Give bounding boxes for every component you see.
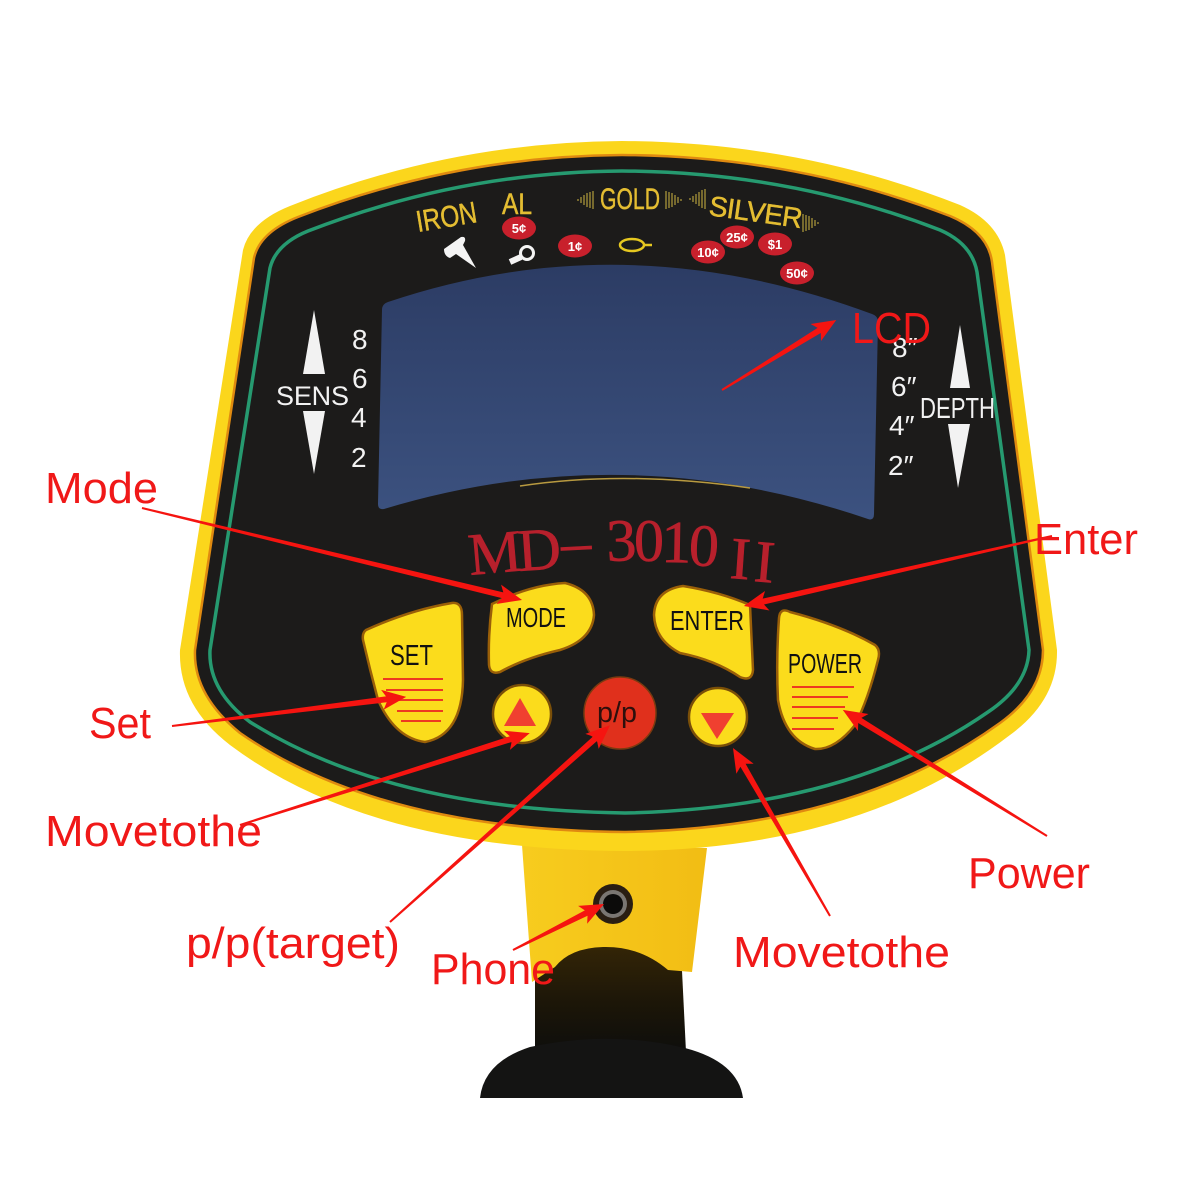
coin markers bbox=[502, 216, 814, 284]
annotation arrows bbox=[140, 311, 1054, 959]
sens scale: 8 bbox=[352, 324, 368, 355]
button: enter bbox=[654, 586, 753, 678]
arrow: move down bbox=[724, 743, 839, 921]
button: up arrow bbox=[493, 685, 551, 743]
button: set: SET bbox=[390, 640, 433, 672]
arrow: Set bbox=[171, 687, 407, 736]
annotation labels: LCD bbox=[852, 304, 931, 353]
sens scale: 4 bbox=[351, 402, 367, 433]
coin markers: 25¢ bbox=[726, 230, 748, 245]
arrow: p/p bbox=[383, 718, 617, 929]
coin markers: 10¢ bbox=[697, 245, 719, 260]
sens scale bbox=[276, 310, 368, 474]
button: p/p: p/p bbox=[597, 697, 637, 729]
sens scale: 2 bbox=[351, 442, 367, 473]
depth scale: 8″ bbox=[892, 332, 918, 363]
button: p/p bbox=[584, 677, 656, 749]
annotation labels: p/p(target) bbox=[186, 919, 400, 968]
depth scale bbox=[888, 325, 995, 488]
arrow: move up bbox=[237, 724, 533, 835]
scale labels: metal types: IRON bbox=[414, 196, 479, 239]
icon: nail bbox=[444, 237, 476, 268]
annotation labels: Phone bbox=[431, 945, 555, 994]
arrow: Phone bbox=[508, 895, 609, 959]
depth scale: 2″ bbox=[888, 450, 914, 481]
button: down arrow bbox=[689, 688, 747, 746]
black faceplate bbox=[195, 155, 1043, 832]
sens scale: SENS bbox=[276, 381, 349, 411]
button: mode bbox=[489, 583, 594, 673]
button: power: POWER bbox=[788, 648, 862, 679]
icon: ring bbox=[620, 239, 652, 251]
depth scale: 4″ bbox=[889, 410, 915, 441]
coin markers: 5¢ bbox=[512, 221, 526, 236]
LCD screen bbox=[378, 265, 878, 519]
arrow: Mode bbox=[140, 498, 524, 610]
annotation labels bbox=[45, 304, 1138, 994]
button: mode: MODE bbox=[506, 602, 566, 633]
yellow housing bbox=[180, 141, 1057, 851]
depth scale: DEPTH bbox=[920, 393, 995, 425]
annotation labels: Set bbox=[89, 699, 151, 748]
annotation labels: Mode bbox=[45, 464, 158, 513]
handle neck bbox=[535, 930, 686, 1052]
scale labels: metal types bbox=[414, 183, 805, 239]
coin markers: 50¢ bbox=[786, 266, 808, 281]
coin markers: 1¢ bbox=[568, 239, 582, 254]
green border line bbox=[210, 171, 1029, 813]
scale labels: metal types: AL bbox=[502, 188, 532, 221]
arrow: LCD bbox=[717, 311, 841, 399]
annotation labels: Movetothe bbox=[733, 928, 950, 977]
icon: key bbox=[510, 246, 534, 262]
scale labels: metal types: SILVER bbox=[707, 190, 805, 234]
button: set bbox=[363, 603, 463, 742]
sens scale: 6 bbox=[352, 363, 368, 394]
button: power bbox=[777, 610, 879, 749]
annotation labels: Enter bbox=[1034, 515, 1138, 564]
arrow: Power bbox=[838, 701, 1052, 845]
depth scale: 6″ bbox=[891, 371, 917, 402]
annotation labels: Power bbox=[968, 849, 1090, 898]
model name: MD–3010II bbox=[465, 507, 778, 596]
handle grip bbox=[480, 1039, 743, 1098]
icon: phone jack bbox=[593, 884, 633, 924]
button: enter: ENTER bbox=[670, 605, 744, 636]
signal wave marks bbox=[578, 189, 818, 232]
annotation labels: Movetothe bbox=[45, 807, 262, 856]
arrow: Enter bbox=[742, 526, 1054, 616]
scale labels: metal types: GOLD bbox=[600, 183, 660, 216]
neck bracket bbox=[522, 845, 707, 982]
coin markers: $1 bbox=[768, 237, 782, 252]
